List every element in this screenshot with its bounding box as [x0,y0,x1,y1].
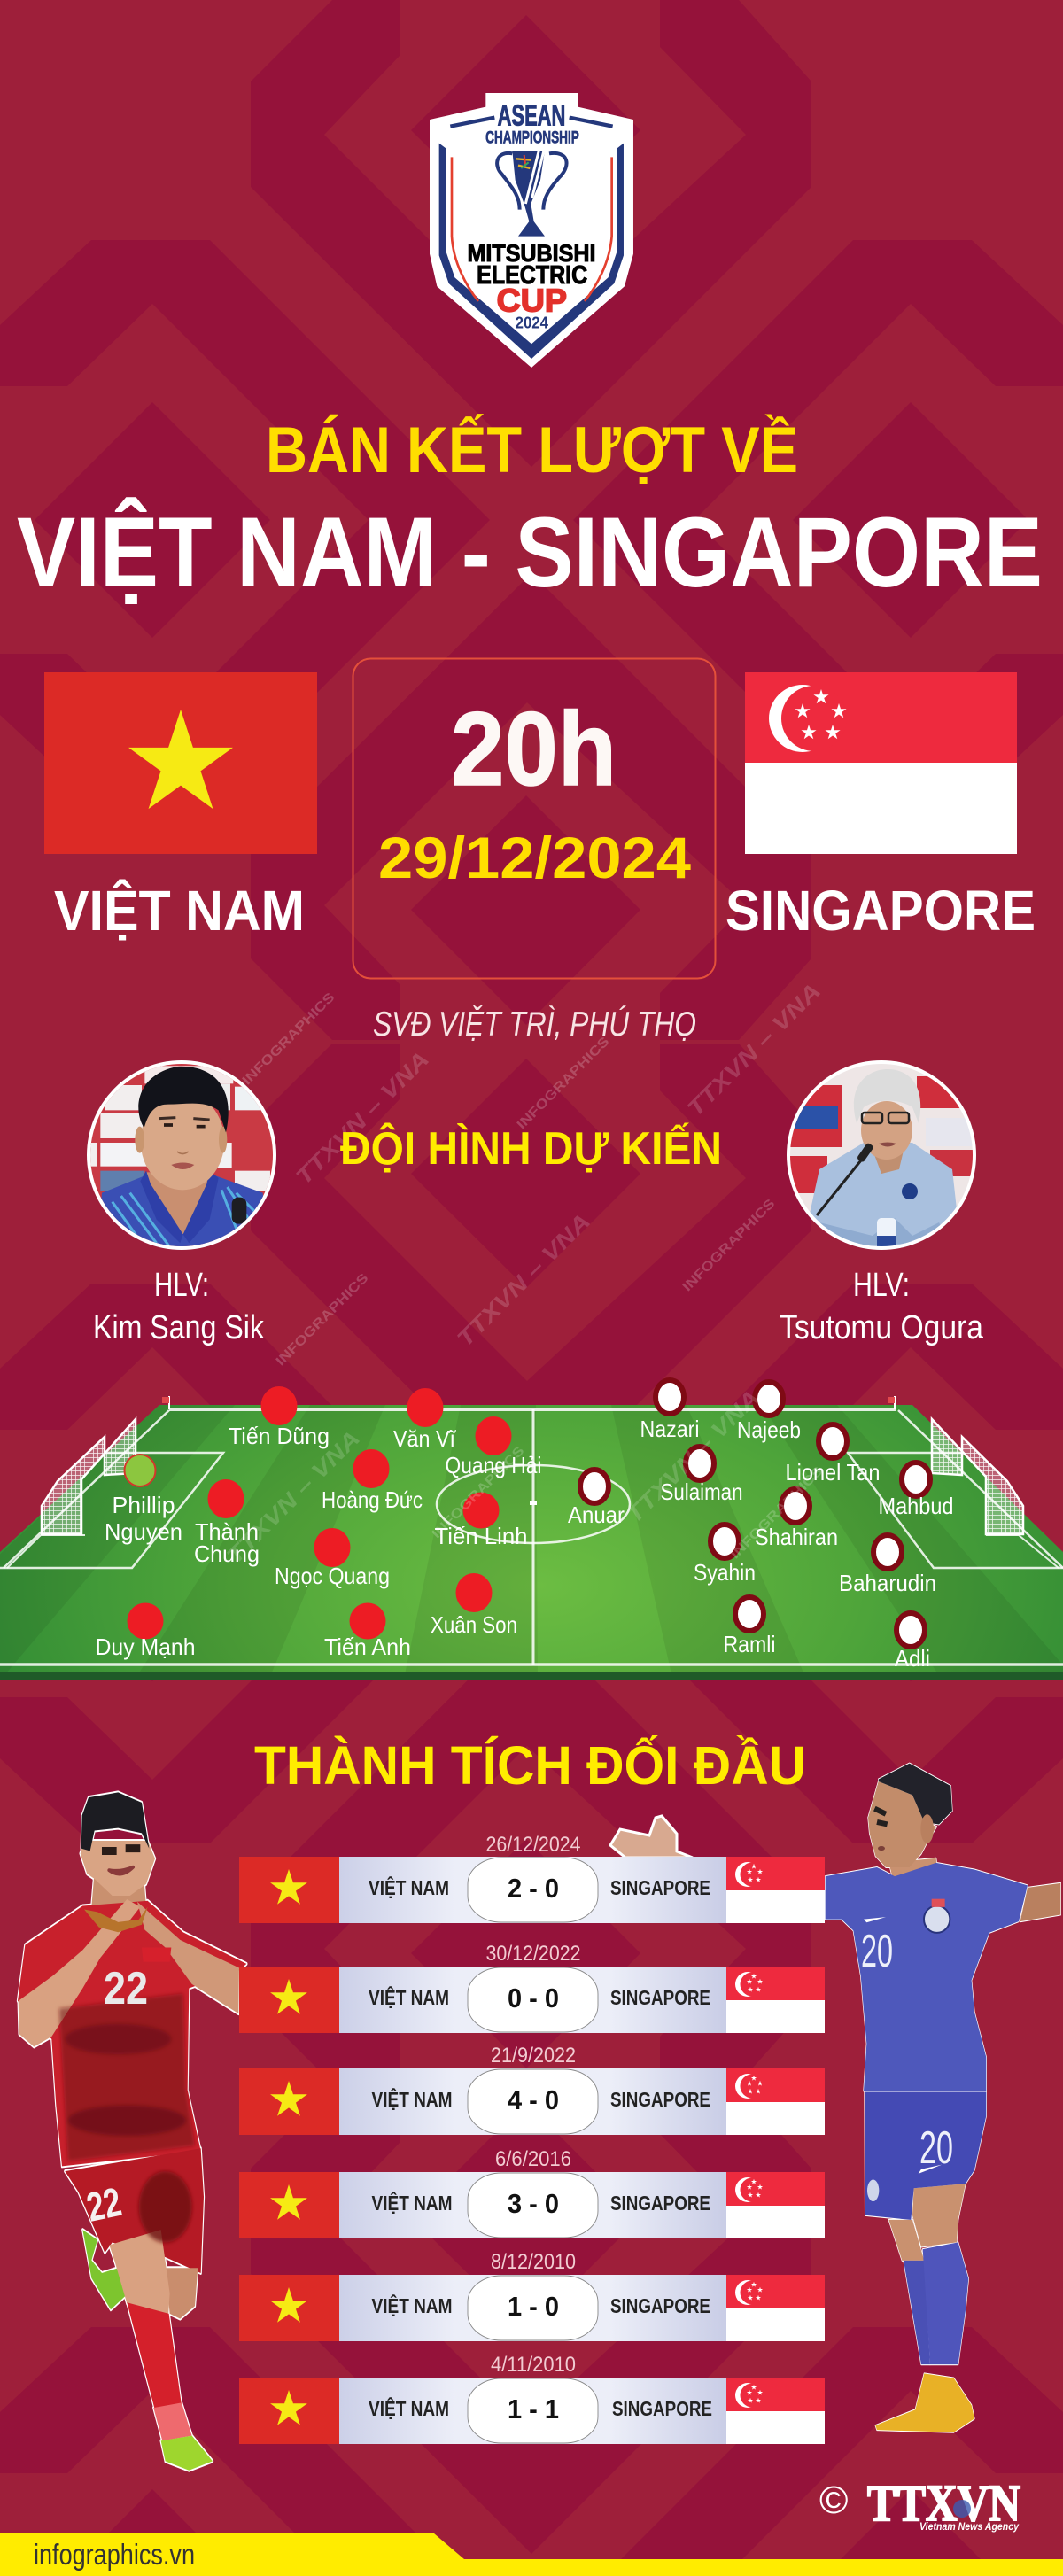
result row: 8/12/2010: 8/12/2010 [491,2250,576,2274]
result row: 6/6/2016 [239,2147,825,2238]
lineup: Singapore players: Mahbud [879,1493,953,1519]
lineup: Việt Nam players: Thành [195,1518,259,1545]
result row: 6/6/2016: 6/6/2016 [495,2147,571,2171]
result row: 30/12/2022: 30/12/2022 [485,1942,581,1966]
lineup: Singapore players [568,1380,953,1672]
logo: ASEAN Mitsubishi Electric Cup 2024: MITSUBISHI [467,240,595,267]
heading: semifinal second leg: BÁN KẾT LƯỢT VỀ [266,415,798,486]
lineup: Singapore players: Lionel Tan [785,1459,881,1486]
watermarks: INFOGRAPHICS [239,989,338,1088]
result row: 6/6/2016: SINGAPORE [610,2192,710,2215]
coach name: Kim Sang Sik [93,1267,265,1346]
icon: corner flags [162,1396,895,1409]
lineup: Singapore players: Syahin [694,1559,756,1586]
lineup: Singapore players: Ramli [723,1631,776,1657]
watermarks: INFOGRAPHICS [514,1034,612,1132]
lineup: Việt Nam players: Hoàng Đức [322,1486,423,1513]
result row: 26/12/2024: 26/12/2024 [485,1833,581,1857]
logo: ASEAN Mitsubishi Electric Cup 2024 [430,93,633,368]
photo: coach Kim Sang Sik [86,1060,277,1255]
result row: 6/6/2016: VIỆT NAM [372,2191,452,2215]
lineup: Singapore players: Sulaiman [661,1478,742,1505]
icon: Singapore flag [745,672,1017,854]
lineup: Việt Nam players: Văn Vĩ [393,1425,457,1452]
result row: 4/11/2010: SINGAPORE [612,2397,712,2420]
result row: 21/9/2022: 4 - 0 [508,2084,559,2115]
lineup: Việt Nam players: Quang Hải [445,1452,542,1478]
result row: 8/12/2010: 1 - 0 [508,2291,559,2322]
result row: 26/12/2024: 2 - 0 [508,1873,559,1904]
icon: Vietnam flag [44,672,317,854]
time: 20h [451,691,617,808]
watermarks on pitch: TTXVN – VNA [622,1385,764,1528]
lineup: Việt Nam players [96,1386,542,1660]
player: Việt Nam number 22 [18,1792,246,2471]
result row: 26/12/2024: VIỆT NAM [369,1875,449,1899]
watermarks on pitch: INFOGRAPHICS [429,1443,527,1541]
result row: 21/9/2022 [239,2044,825,2135]
football pitch with lineups [0,1380,1063,1680]
lineup: Việt Nam players: Tiến Linh [434,1523,528,1549]
coach name: Kim Sang Sik: HLV: [154,1267,209,1304]
result row: 21/9/2022: VIỆT NAM [372,2087,452,2111]
venue: SVĐ VIỆT TRÌ, PHÚ THỌ [373,1005,696,1044]
photo: coach Tsutomu Ogura [787,1060,976,1253]
copyright and TTXVN logo: © [819,2479,848,2522]
icon: left goal [42,1419,136,1534]
lineup: Việt Nam players: Ngọc Quang [275,1563,390,1589]
result row: 8/12/2010: SINGAPORE [610,2294,710,2317]
team name: Singapore: SINGAPORE [725,879,1036,943]
coach name: Tsutomu Ogura: Tsutomu Ogura [780,1309,984,1346]
result row: 21/9/2022: SINGAPORE [610,2088,710,2111]
result row: 30/12/2022 [239,1942,825,2033]
copyright and TTXVN logo [819,2474,1020,2533]
logo: ASEAN Mitsubishi Electric Cup 2024: ASEAN [498,100,565,133]
copyright and TTXVN logo: TTXVN [867,2474,1020,2532]
result row: 30/12/2022: 0 - 0 [508,1982,559,2013]
result row: 8/12/2010: VIỆT NAM [372,2293,452,2317]
heading: expected lineup: ĐỘI HÌNH DỰ KIẾN [340,1122,722,1175]
watermarks on pitch: TTXVN – VNA [222,1426,365,1569]
heading: head-to-head record: THÀNH TÍCH ĐỐI ĐẦU [254,1735,806,1796]
watermarks: INFOGRAPHICS [679,1196,778,1294]
result row: 6/6/2016: 3 - 0 [508,2188,559,2219]
coach name: Tsutomu Ogura [780,1267,984,1346]
result row: 4/11/2010: 1 - 1 [508,2394,559,2425]
icon: hand of Singapore player [610,1816,693,1858]
copyright and TTXVN logo: Vietnam News Agency [919,2520,1020,2533]
logo: ASEAN Mitsubishi Electric Cup 2024: ELECTRIC [477,261,587,290]
date: 29/12/2024 [378,825,691,890]
lineup: Việt Nam players: Tiến Dũng [229,1423,330,1449]
logo: ASEAN Mitsubishi Electric Cup 2024: 2024 [516,314,549,332]
result row: 4/11/2010: 4/11/2010 [491,2353,576,2377]
result row: 8/12/2010 [239,2250,825,2341]
watermarks on pitch [222,1385,826,1569]
watermarks: TTXVN – VNA [683,979,826,1121]
logo: ASEAN Mitsubishi Electric Cup 2024: CHAMPIONSHIP [485,129,579,148]
lineup: Việt Nam players: Phillip [112,1492,175,1518]
panel: match time [353,659,716,978]
result row: 30/12/2022: SINGAPORE [610,1986,710,2009]
team name: Việt Nam: VIỆT NAM [54,878,305,943]
icon: right goal [932,1419,1023,1534]
result row: 26/12/2024: SINGAPORE [610,1876,710,1899]
result row: 4/11/2010: VIỆT NAM [369,2396,449,2420]
footer site name: infographics.vn [34,2538,195,2571]
player: Singapore number 20: 20 [861,1926,893,1977]
lineup: Việt Nam players: Nguyen [105,1518,182,1545]
lineup: Singapore players: Baharudin [839,1570,936,1596]
logo: ASEAN Mitsubishi Electric Cup 2024: CUP [497,283,567,319]
player: Việt Nam number 22: 22 [82,2178,125,2231]
lineup: Singapore players: Adli [895,1645,930,1672]
lineup: Singapore players: Nazari [640,1416,700,1442]
watermarks: INFOGRAPHICS [273,1270,371,1369]
lineup: Việt Nam players: Tiến Anh [324,1633,411,1660]
lineup: Việt Nam players: Xuân Son [431,1611,517,1638]
coach name: Kim Sang Sik: Kim Sang Sik [93,1309,265,1346]
result row: 4/11/2010 [239,2353,825,2444]
watermarks [239,979,826,1369]
icon: trophy [497,151,567,237]
result row: 21/9/2022: 21/9/2022 [491,2044,576,2068]
lineup: Singapore players: Shahiran [755,1524,838,1550]
watermarks on pitch: INFOGRAPHICS [727,1463,826,1562]
watermarks: TTXVN – VNA [453,1209,595,1352]
watermarks: TTXVN – VNA [291,1047,434,1190]
player: Singapore number 20: 20 [919,2122,953,2174]
player: Singapore number 20 [826,1764,1060,2432]
player: Việt Nam number 22: 22 [104,1963,148,2014]
lineup: Singapore players: Anuar [568,1501,625,1528]
footer bar [0,2533,1063,2576]
result row: 30/12/2022: VIỆT NAM [369,1985,449,2009]
lineup: Việt Nam players: Chung [194,1540,260,1567]
coach name: Tsutomu Ogura: HLV: [853,1267,910,1304]
lineup: Việt Nam players: Duy Mạnh [96,1633,195,1660]
lineup: Singapore players: Najeeb [737,1416,801,1443]
result row: 26/12/2024 [239,1833,825,1923]
